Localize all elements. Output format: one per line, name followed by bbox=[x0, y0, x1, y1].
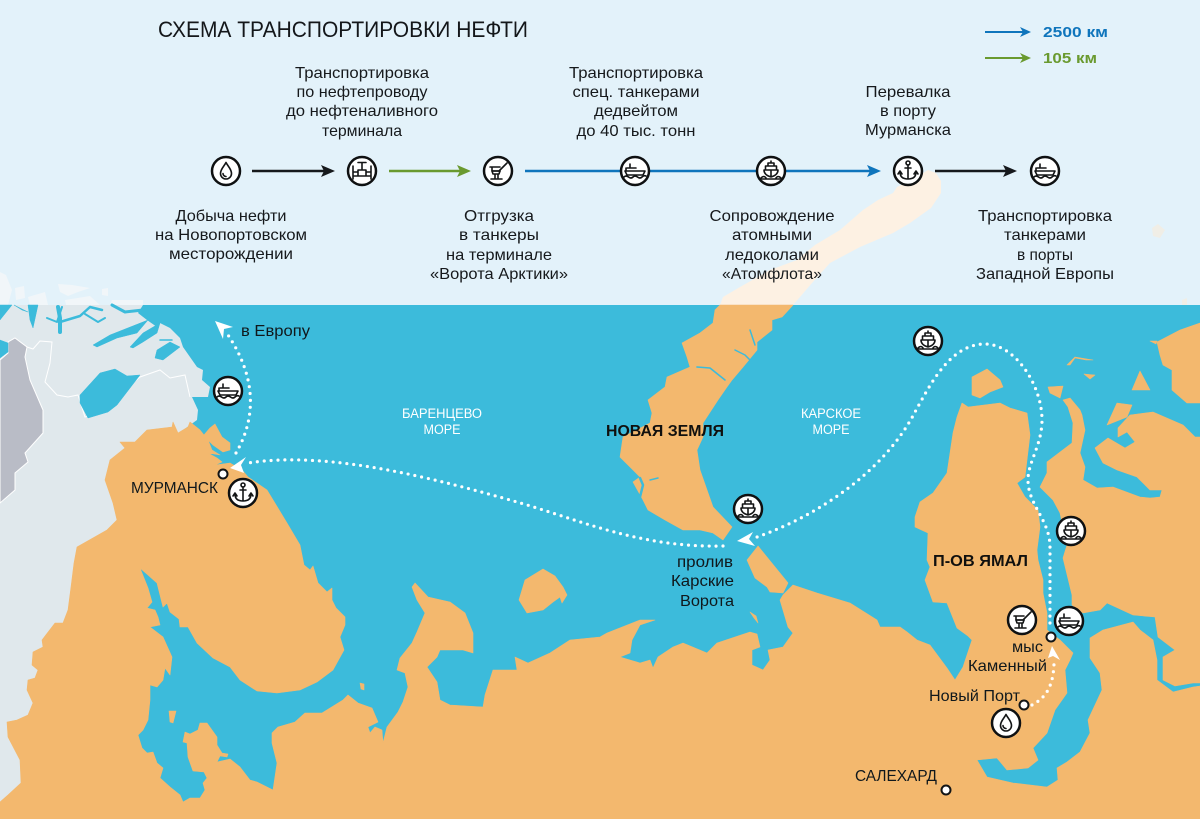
map icon: icebreaker in Ob gulf bbox=[1057, 517, 1085, 545]
legend: 2500 km bbox=[985, 24, 1108, 41]
legend: 105 km bbox=[985, 50, 1097, 67]
step text: tanker loading: «Ворота Арктики» bbox=[430, 266, 568, 283]
map label: Barents sea: МОРЕ bbox=[424, 422, 460, 437]
flow icon: pipeline terminal bbox=[348, 157, 376, 185]
map: Kara sea islands bbox=[972, 341, 1157, 425]
step text: Murmansk transshipment: Мурманска bbox=[865, 122, 951, 139]
arrow: pipeline bbox=[252, 165, 335, 177]
step text: tanker loading: на терминале bbox=[446, 247, 552, 264]
map: Gydan peninsula bbox=[1040, 398, 1200, 686]
map: country borders bbox=[27, 341, 190, 417]
step text: special tankers: спец. танкерами bbox=[572, 84, 700, 101]
step text: icebreaker escort: атомными bbox=[732, 227, 812, 244]
step text: pipeline transport: до нефтеналивного bbox=[286, 103, 438, 120]
step text: oil production bbox=[155, 208, 307, 263]
map label: Novaya Zemlya: НОВАЯ ЗЕМЛЯ bbox=[606, 423, 724, 440]
map label: to Europe: в Европу bbox=[241, 323, 310, 340]
step text: transport to Western Europe: в порты bbox=[1017, 247, 1073, 264]
map label: Cape Kamenny: Каменный bbox=[968, 658, 1047, 675]
step text: special tankers: дедвейтом bbox=[594, 103, 678, 120]
step text: transport to Western Europe: Западной Европы bbox=[976, 266, 1114, 283]
map label: Barents sea: БАРЕНЦЕВО bbox=[402, 406, 482, 421]
map: dark grey country bbox=[0, 338, 43, 503]
map: neighbouring countries, grey bbox=[0, 305, 210, 819]
map label: Yamal peninsula: П-ОВ ЯМАЛ bbox=[933, 553, 1028, 570]
map: fjords of northern Norway bbox=[0, 305, 180, 418]
route: Novy Port to Cape Kamenny bbox=[1032, 646, 1060, 705]
map: faded arctic islands above the map edge bbox=[0, 272, 143, 305]
step text: Murmansk transshipment: в порту bbox=[880, 103, 936, 120]
arrow: 2500 km blue leg bbox=[525, 165, 881, 177]
legend: 2500 km: 2500 км bbox=[1043, 24, 1108, 41]
map icon: loading terminal bbox=[1008, 606, 1036, 634]
step text: tanker loading: Отгрузка bbox=[464, 208, 534, 225]
flow icon: loading arm bbox=[484, 157, 512, 185]
map label: Salekhard: САЛЕХАРД bbox=[855, 768, 937, 785]
map label: Kara Gates strait bbox=[671, 554, 734, 610]
legend: 105 km: 105 км bbox=[1043, 50, 1097, 67]
map: Vaygach island bbox=[747, 546, 788, 593]
step text: icebreaker escort: «Атомфлота» bbox=[722, 266, 822, 283]
flow icon: anchor bbox=[894, 157, 922, 185]
map label: Cape Kamenny bbox=[968, 639, 1047, 675]
map icon: anchor at Murmansk bbox=[229, 479, 257, 507]
arrow: onward shipping bbox=[935, 165, 1017, 177]
map label: Kara Gates strait: Ворота bbox=[680, 593, 734, 610]
map: Novaya Zemlya bbox=[620, 305, 793, 540]
step text: tanker loading: в танкеры bbox=[459, 227, 539, 244]
step text: icebreaker escort: ледоколами bbox=[725, 247, 819, 264]
map: Kara sea east land bbox=[1157, 323, 1200, 403]
map: Russian mainland with Kola, Yamal and Ob gulf bbox=[0, 403, 1200, 819]
step text: Murmansk transshipment: Перевалка bbox=[866, 84, 951, 101]
step text: oil production: на Новопортовском bbox=[155, 227, 307, 244]
flow icon: tanker to Europe bbox=[1031, 157, 1059, 185]
map label: Novy Port: Новый Порт bbox=[929, 688, 1021, 705]
step text: pipeline transport: терминала bbox=[322, 123, 402, 140]
title: СХЕМА ТРАНСПОРТИРОВКИ НЕФТИ bbox=[158, 17, 528, 42]
map label: Kara sea: МОРЕ bbox=[812, 422, 850, 437]
map: faded far islands bbox=[1152, 224, 1187, 305]
step text: transport to Western Europe: Транспортировка bbox=[978, 208, 1112, 225]
route: Kara Gates to Murmansk bbox=[230, 457, 723, 546]
step text: transport to Western Europe bbox=[976, 208, 1114, 283]
arrow: 105 km green leg bbox=[389, 165, 471, 177]
map: faded north part of Novaya Zemlya bbox=[720, 170, 941, 305]
step text: tanker loading bbox=[430, 208, 568, 283]
map icon: oil drop bbox=[992, 709, 1020, 737]
map label: Kara Gates strait: Карские bbox=[671, 573, 734, 590]
step text: oil production: Добыча нефти bbox=[176, 208, 286, 225]
step text: icebreaker escort: Сопровождение bbox=[710, 208, 835, 225]
map label: Kara Gates strait: пролив bbox=[677, 554, 733, 571]
map: small islands bbox=[169, 596, 928, 723]
map label: Cape Kamenny: мыс bbox=[1012, 639, 1043, 656]
node: Novy Port bbox=[1020, 700, 1028, 710]
step text: special tankers bbox=[569, 65, 703, 140]
flow icon: oil drop bbox=[212, 157, 240, 185]
map icon: tanker at Cape Kamenny bbox=[1055, 607, 1083, 635]
node: Cape Kamenny bbox=[1046, 632, 1056, 642]
route: Cape Kamenny to Kara Gates bbox=[737, 344, 1050, 623]
node: Murmansk bbox=[218, 470, 228, 478]
map label: Kara sea: КАРСКОЕ bbox=[801, 406, 861, 421]
map label: Murmansk: МУРМАНСК bbox=[131, 480, 219, 497]
flow icon: tanker bbox=[621, 157, 649, 185]
map sea background bbox=[0, 305, 1200, 819]
step text: icebreaker escort bbox=[710, 208, 835, 283]
step text: Murmansk transshipment bbox=[865, 84, 951, 139]
map icon: icebreaker in Kara sea north bbox=[914, 327, 942, 355]
step text: special tankers: Транспортировка bbox=[569, 65, 703, 82]
map icon: tanker near Norway bbox=[214, 377, 242, 405]
step text: transport to Western Europe: танкерами bbox=[1004, 227, 1086, 244]
map: Novaya Zemlya inlets bbox=[640, 330, 755, 497]
step text: special tankers: до 40 тыс. тонн bbox=[576, 123, 696, 140]
step text: pipeline transport: по нефтепроводу bbox=[296, 84, 428, 101]
step text: oil production: месторождении bbox=[169, 246, 293, 263]
map: Kolguev island bbox=[519, 569, 567, 613]
step text: pipeline transport: Транспортировка bbox=[295, 65, 429, 82]
step text: pipeline transport bbox=[286, 65, 438, 140]
flow icon: icebreaker bbox=[757, 157, 785, 185]
header background band bbox=[0, 0, 1200, 305]
node: Salekhard bbox=[942, 786, 950, 794]
map icon: icebreaker at Kara Gates bbox=[734, 495, 762, 523]
route: Murmansk to Europe bbox=[215, 321, 250, 453]
